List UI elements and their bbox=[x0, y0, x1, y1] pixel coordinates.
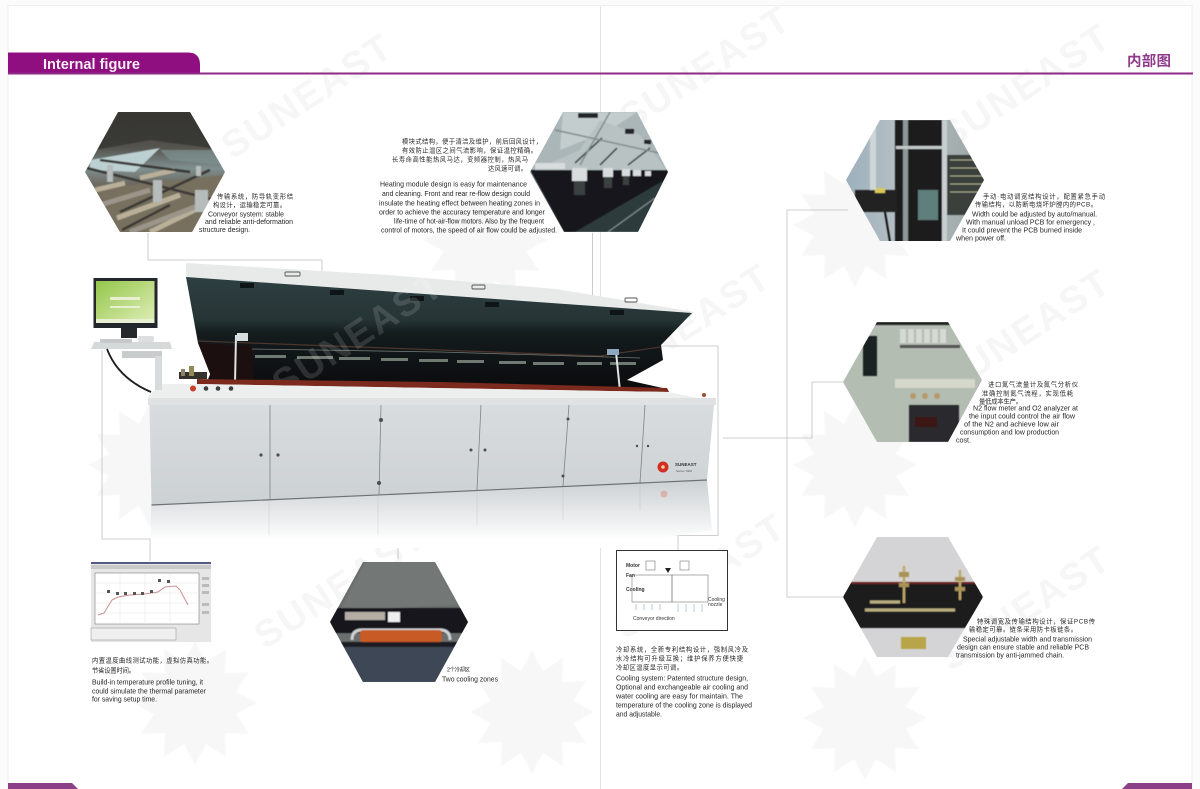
heating module caption: and cleaning. Front and rear re-flow design could bbox=[382, 189, 530, 198]
cooling zones caption bbox=[442, 666, 498, 684]
nitrogen panel caption: consumption and low production bbox=[960, 428, 1059, 436]
brand logo: Series 7000 bbox=[676, 469, 692, 473]
cabinet doors bbox=[150, 405, 714, 505]
conveyor caption: Conveyor system: stable bbox=[208, 210, 284, 218]
nitrogen panel caption: 进口氮气流量计及氮气分析仪 bbox=[988, 380, 1079, 388]
background watermarks: SUNEAST wordmarks: SUNEAST bbox=[932, 538, 1119, 680]
background watermarks: SUNEAST wordmarks: SUNEAST bbox=[607, 506, 794, 648]
background watermarks: gear emblems bbox=[88, 163, 927, 780]
background watermarks: SUNEAST wordmarks: SUNEAST bbox=[592, 256, 779, 398]
width adjustment caption: when power off. bbox=[955, 234, 1006, 242]
conveyor caption bbox=[199, 192, 293, 234]
nitrogen panel caption: N2 flow meter and O2 analyzer at bbox=[973, 404, 1078, 412]
heating module caption: 达风速可调。 bbox=[488, 164, 527, 172]
transmission photo hexagon bbox=[843, 537, 983, 657]
panel: width adjustment bbox=[846, 120, 1105, 242]
heating module caption: control of motors, the speed of air flow could be adjusted. bbox=[381, 226, 557, 234]
width adjustment photo hexagon bbox=[846, 120, 986, 242]
cooling zones photo hexagon bbox=[330, 562, 470, 682]
width adjustment caption: With manual unload PCB for emergency , bbox=[966, 218, 1095, 226]
footer tab left bbox=[8, 783, 78, 789]
cabinet door seams bbox=[270, 405, 645, 499]
cooling system caption: 水冷结构可升级互换；维护保养方便快捷 bbox=[616, 654, 744, 662]
width adjustment caption: 传输结构，以防断电烧坏炉膛内的PCB。 bbox=[975, 200, 1097, 208]
background watermarks: SUNEAST wordmarks bbox=[214, 0, 1119, 680]
floor reflection bbox=[151, 480, 712, 548]
header tab bbox=[8, 52, 200, 74]
background watermarks: SUNEAST wordmarks: SUNEAST bbox=[612, 0, 799, 140]
raised hood outer shell bbox=[186, 263, 694, 318]
cooling system caption bbox=[615, 644, 752, 718]
control monitor bbox=[94, 278, 158, 338]
panel: two cooling zones bbox=[330, 562, 498, 684]
nitrogen panel caption: 量低成本生产。 bbox=[979, 396, 1022, 406]
control buttons bbox=[190, 386, 706, 397]
cooling structure diagram: Cooling bbox=[708, 597, 725, 603]
heating module caption bbox=[379, 136, 557, 234]
nitrogen panel caption bbox=[956, 380, 1079, 444]
panel: temperature profile bbox=[91, 562, 213, 704]
cable bbox=[107, 349, 151, 392]
width adjustment caption bbox=[955, 192, 1105, 242]
temperature profile screenshot bbox=[91, 562, 211, 642]
cooling zones caption: 2个冷却区 bbox=[447, 666, 471, 674]
hood handles bbox=[285, 272, 637, 302]
transmission caption: design can ensure stable and reliable PCB bbox=[957, 642, 1089, 652]
cooling system caption: 冷却区温度显示可调。 bbox=[616, 662, 683, 672]
watermark over hood: SUNEAST bbox=[265, 264, 452, 406]
temperature profile caption bbox=[92, 656, 213, 704]
background watermarks: SUNEAST wordmarks: SUNEAST bbox=[247, 516, 434, 658]
panel: nitrogen flow meter bbox=[843, 322, 1079, 444]
panel: cooling system bbox=[615, 550, 752, 718]
width adjustment caption: Width could be adjusted by auto/manual. bbox=[972, 210, 1097, 218]
nitrogen panel caption: cost. bbox=[956, 436, 971, 444]
conveyor caption: 传输系统，防导轨变形结 bbox=[217, 192, 293, 200]
conveyor photo hexagon bbox=[85, 112, 225, 232]
top deck bbox=[148, 384, 716, 405]
heating module caption: life-time of hot-air-flow motors. Also by the frequent bbox=[394, 216, 544, 226]
cooling structure diagram bbox=[616, 550, 728, 630]
transmission caption: transmission by anti-jammed chain. bbox=[956, 650, 1064, 660]
transmission caption: 特殊调宽及传输结构设计，保证PCB传 bbox=[977, 616, 1095, 626]
panel: conveyor system bbox=[85, 112, 293, 234]
background watermarks: SUNEAST wordmarks: SUNEAST bbox=[932, 16, 1119, 158]
heating module caption: 模块式结构，便于清洁及维护，前后回风设计， bbox=[402, 136, 542, 146]
cooling system caption: temperature of the cooling zone is displayed bbox=[616, 700, 752, 710]
heating module caption: order to achieve the accuracy temperature and longer bbox=[379, 208, 546, 216]
strut brackets bbox=[237, 333, 619, 355]
English section title: Internal figure bbox=[43, 57, 140, 73]
heating module caption: Heating module design is easy for maintenance bbox=[380, 180, 527, 188]
temperature profile caption: 节省设置时间。 bbox=[92, 666, 135, 674]
red oven rim bbox=[197, 379, 669, 392]
nitrogen panel photo hexagon bbox=[843, 322, 983, 442]
cooling system caption: water cooling are easy for maintain. The bbox=[615, 692, 743, 700]
cabinet bottom edge bbox=[152, 480, 707, 505]
cooling system caption: Optional and exchangeable air cooling and bbox=[616, 682, 748, 692]
cooling structure diagram: nozzle bbox=[708, 602, 723, 608]
cooling structure diagram: Motor bbox=[626, 563, 640, 569]
nitrogen panel caption: the input could control the air flow bbox=[969, 412, 1076, 420]
width adjustment caption: It could prevent the PCB burned inside bbox=[962, 226, 1082, 234]
header rule bbox=[8, 72, 1193, 74]
conveyor caption: 构设计，运输稳定可靠。 bbox=[213, 200, 286, 209]
temperature profile caption: for saving setup time. bbox=[92, 694, 157, 704]
panel: heating module bbox=[379, 112, 675, 234]
deck front strip bbox=[148, 398, 716, 405]
cooling system caption: and adjustable. bbox=[616, 710, 662, 718]
nitrogen panel caption: of the N2 and achieve low air bbox=[964, 420, 1060, 428]
heating module caption: 长寿命高性能热风马达，变频器控制，热风马 bbox=[392, 154, 528, 164]
nitrogen panel caption: 准确控制氮气流程，实现低耗 bbox=[982, 388, 1074, 398]
hood gas struts bbox=[235, 335, 620, 391]
brand logo: SUNEAST bbox=[675, 462, 697, 467]
cooling structure diagram: Cooling bbox=[626, 587, 645, 593]
connector lines bbox=[102, 210, 848, 597]
heating module caption: 有效防止温区之间气流影响，保证温控精确。 bbox=[402, 146, 537, 154]
transmission caption bbox=[956, 616, 1095, 660]
cooling zones caption: Two cooling zones bbox=[442, 674, 498, 684]
transmission caption: 输稳定可靠。链条采用防卡板链条。 bbox=[969, 624, 1077, 634]
transmission caption: Special adjustable width and transmission bbox=[963, 634, 1092, 644]
reflow oven machine bbox=[91, 263, 716, 548]
temperature profile caption: could simulate the thermal parameter bbox=[92, 686, 207, 696]
header band bbox=[8, 52, 1193, 74]
width adjustment caption: 手动·电动调宽结构设计，配置紧急手动 bbox=[983, 192, 1105, 200]
hood dark interior bbox=[186, 277, 692, 389]
panel: adjustable width transmission bbox=[843, 537, 1095, 660]
temperature profile caption: Build-in temperature profile tuning, it bbox=[92, 678, 203, 686]
background watermarks: SUNEAST wordmarks: SUNEAST bbox=[214, 26, 401, 168]
left conveyor entry bbox=[179, 366, 207, 379]
background watermarks: SUNEAST wordmarks: SUNEAST bbox=[932, 261, 1119, 403]
heating module photo hexagon bbox=[525, 112, 675, 232]
Chinese section title: 内部图 bbox=[1127, 52, 1171, 70]
monitor support arm bbox=[122, 351, 162, 390]
cooling structure diagram: Fan bbox=[626, 573, 635, 579]
brand logo bbox=[658, 462, 697, 473]
heating module caption: insulate the heating effect between heating zones in bbox=[379, 198, 540, 208]
cooling structure diagram: Conveyor direction bbox=[633, 616, 675, 622]
cooling system caption: Cooling system: Patented structure design, bbox=[616, 674, 748, 682]
conveyor caption: and reliable anti-deformation bbox=[205, 217, 293, 226]
cooling system caption: 冷却系统，全新专利结构设计，强制风冷及 bbox=[616, 644, 749, 654]
footer tab right bbox=[1122, 783, 1192, 789]
keyboard tray bbox=[91, 336, 172, 349]
conveyor caption: structure design. bbox=[199, 225, 250, 234]
temperature profile caption: 内置温度曲线测试功能，虚拟仿真功能。 bbox=[92, 656, 213, 664]
door locks bbox=[259, 418, 649, 485]
hood interior details bbox=[198, 283, 660, 380]
